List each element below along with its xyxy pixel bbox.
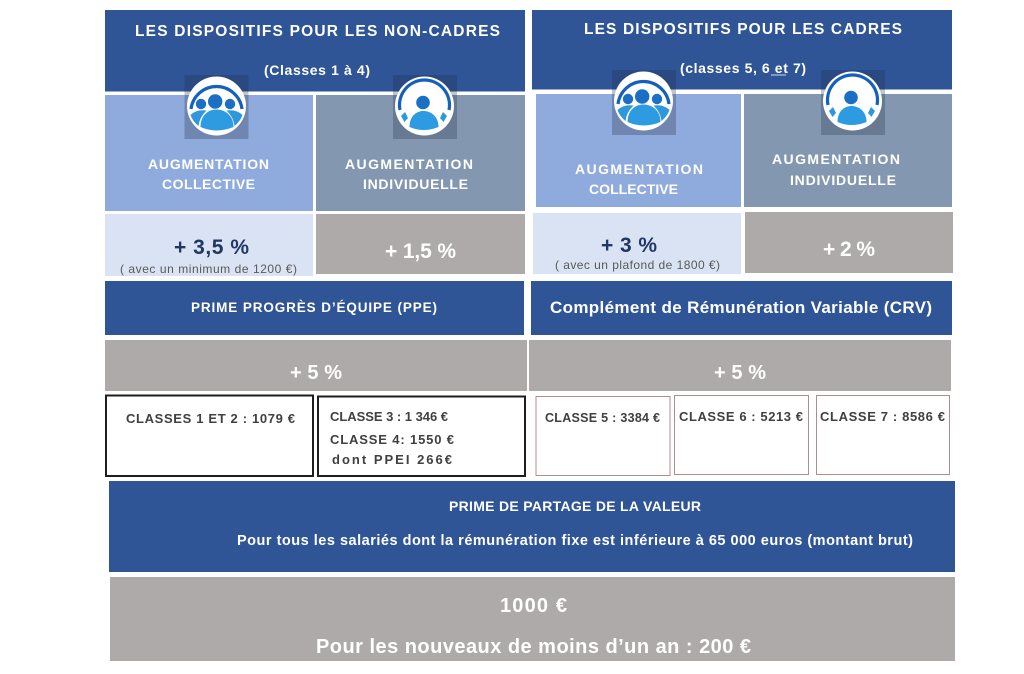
icon: group of people bbox=[612, 70, 676, 135]
heading: prime progrès d'équipe: PRIME PROGRÈS D’ÉQUIPE (PPE) bbox=[191, 300, 437, 315]
card: augmentation individuelle non-cadres bbox=[316, 95, 525, 211]
value: 1000 euros: Pour les nouveaux de moins d’un an : 200 € bbox=[316, 636, 751, 658]
card: augmentation individuelle cadres: AUGMENTATION bbox=[772, 151, 900, 167]
value: +5 % CRV: + 5 % bbox=[714, 362, 766, 384]
box: classe 6: CLASSE 6 : 5213 € bbox=[679, 409, 803, 424]
heading: complément de rémunération variable: Complément de Rémunération Variable (CRV) bbox=[550, 298, 932, 317]
heading: prime de partage bbox=[109, 481, 955, 572]
box: classes 1 et 2 bbox=[106, 396, 313, 476]
value: +3 %: + 3 % bbox=[601, 234, 657, 257]
icon: single person bbox=[821, 70, 885, 135]
heading: prime de partage: Pour tous les salariés dont la rémunération fixe est inférieure à 65 000 euros (montant brut) bbox=[237, 533, 913, 549]
value: +1,5 %: + 1,5 % bbox=[385, 240, 456, 263]
box: classes 3 et 4: dont PPEI 266€ bbox=[332, 452, 452, 467]
card: augmentation individuelle non-cadres: INDIVIDUELLE bbox=[363, 176, 468, 192]
value: +5 % PPE bbox=[105, 340, 527, 391]
card: augmentation collective non-cadres bbox=[105, 95, 313, 211]
card: augmentation individuelle cadres bbox=[744, 94, 952, 207]
box: classe 5 bbox=[536, 396, 670, 476]
card: augmentation individuelle cadres: INDIVIDUELLE bbox=[790, 172, 896, 188]
value: +2 % bbox=[745, 212, 953, 273]
box: classes 1 et 2: CLASSES 1 ET 2 : 1079 € bbox=[126, 411, 295, 426]
box: classe 5: CLASSE 5 : 3384 € bbox=[545, 411, 660, 425]
value: +1,5 % bbox=[316, 214, 525, 274]
box: classe 7 bbox=[816, 396, 950, 474]
panel: non-cadres bbox=[105, 10, 527, 476]
value: 1000 euros: 1000 € bbox=[500, 595, 567, 617]
header: non-cadres bbox=[105, 10, 525, 92]
box: classe 7: CLASSE 7 : 8586 € bbox=[820, 409, 945, 424]
header: cadres bbox=[532, 10, 952, 90]
card: augmentation individuelle non-cadres: AUGMENTATION bbox=[345, 156, 473, 172]
heading: prime progrès d'équipe bbox=[105, 281, 524, 335]
card: augmentation collective non-cadres: COLLECTIVE bbox=[162, 176, 255, 192]
box: classes 3 et 4: CLASSE 3 : 1 346 € bbox=[330, 409, 448, 424]
box: classes 3 et 4: CLASSE 4: 1550 € bbox=[330, 432, 454, 447]
box: classes 3 et 4 bbox=[318, 396, 525, 476]
card: augmentation collective cadres: AUGMENTATION bbox=[575, 161, 703, 177]
value: +5 % CRV bbox=[529, 340, 951, 391]
card: augmentation collective cadres: COLLECTIVE bbox=[589, 181, 678, 197]
card: augmentation collective non-cadres: AUGMENTATION bbox=[148, 156, 269, 172]
header: non-cadres: LES DISPOSITIFS POUR LES NON-CADRES bbox=[135, 23, 500, 40]
header: cadres: LES DISPOSITIFS POUR LES CADRES bbox=[584, 21, 902, 38]
value: +3 % bbox=[533, 213, 741, 274]
value: +5 % PPE: + 5 % bbox=[290, 362, 342, 384]
panel: cadres bbox=[529, 10, 953, 476]
value: +3,5 %: ( avec un minimum de 1200 €) bbox=[120, 262, 297, 276]
box: classe 6 bbox=[674, 396, 808, 474]
value: +3 %: ( avec un plafond de 1800 €) bbox=[555, 258, 720, 272]
value: +3,5 %: + 3,5 % bbox=[174, 236, 249, 259]
icon: group of people bbox=[184, 75, 248, 139]
icon: single person bbox=[393, 75, 457, 139]
value: +3,5 % bbox=[105, 214, 313, 276]
heading: prime de partage: PRIME DE PARTAGE DE LA VALEUR bbox=[449, 498, 701, 514]
card: augmentation collective cadres bbox=[536, 94, 741, 207]
heading: complément de rémunération variable bbox=[531, 281, 952, 335]
value: +2 %: + 2 % bbox=[823, 238, 875, 261]
panel: prime de partage de la valeur bbox=[109, 481, 955, 661]
header: cadres: (classes 5, 6 et 7) bbox=[680, 60, 806, 76]
value: 1000 euros bbox=[110, 577, 955, 661]
header: non-cadres: (Classes 1 à 4) bbox=[264, 62, 370, 78]
